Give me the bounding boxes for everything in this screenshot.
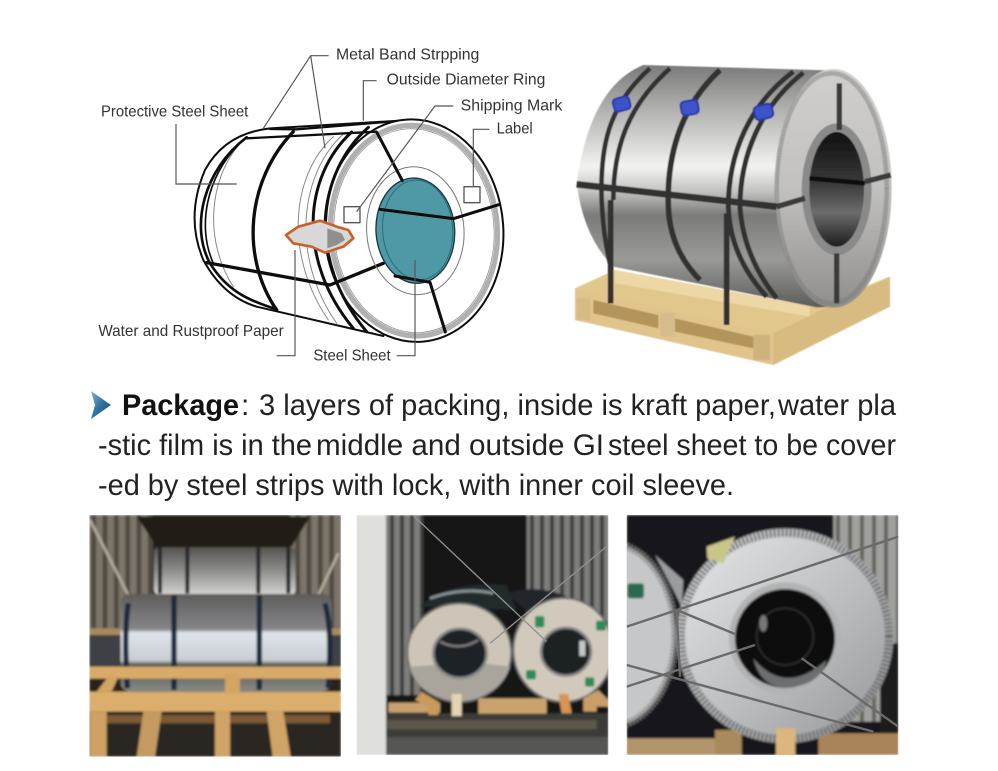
right coil end xyxy=(513,598,613,702)
steel straps xyxy=(577,68,803,325)
left coil end xyxy=(407,603,511,702)
line 1: Package xyxy=(122,389,239,422)
line 2: middle and outside GI xyxy=(316,429,604,462)
lashing wires xyxy=(413,515,608,643)
coil front face xyxy=(775,69,892,308)
label: Water and Rustproof Paper: Water and Rustproof Paper xyxy=(98,323,284,340)
green clips xyxy=(535,616,544,627)
line 1: water pla xyxy=(777,389,896,422)
lashing wires xyxy=(627,537,898,732)
photo 1: coils in container with timber bracing xyxy=(89,515,341,757)
label: Steel Sheet: Steel Sheet xyxy=(313,347,391,364)
main coil end xyxy=(677,529,893,743)
package description text xyxy=(91,389,896,502)
line 1: 3 layers of packing, inside is kraft paper, xyxy=(259,389,776,422)
coil on pallet photo illustration xyxy=(575,65,892,365)
infographic canvas xyxy=(89,48,898,757)
coil wraps xyxy=(420,584,517,610)
front coil xyxy=(121,594,331,691)
wooden pallet xyxy=(575,270,890,365)
line 1: : xyxy=(241,389,249,422)
timber bracing xyxy=(89,667,341,679)
label: Outside Diameter Ring: Outside Diameter Ring xyxy=(387,72,545,89)
rear coil xyxy=(154,547,296,595)
label: Shipping Mark: Shipping Mark xyxy=(461,97,563,114)
coil body xyxy=(577,65,837,307)
line 3: -ed by steel strips with lock, with inner coil sleeve. xyxy=(98,469,734,502)
left coil xyxy=(626,542,678,729)
label: Label: Label xyxy=(497,120,533,137)
photo 3: close view of coil end in container xyxy=(626,515,898,755)
photo 2: two coils loaded in container xyxy=(357,515,613,755)
line 2: steel sheet to be cover xyxy=(608,429,896,462)
wood floor xyxy=(626,736,716,755)
arrow bullet xyxy=(91,391,111,419)
blue strap locks xyxy=(612,95,774,121)
label: Protective Steel Sheet: Protective Steel Sheet xyxy=(101,103,249,120)
coil structure diagram xyxy=(98,46,563,364)
leader lines xyxy=(176,56,489,356)
label: Metal Band Strpping: Metal Band Strpping xyxy=(336,46,479,63)
line 2: -stic film is in the xyxy=(98,429,312,462)
coil diagram drawing xyxy=(195,113,511,348)
wooden blocks xyxy=(388,703,440,713)
